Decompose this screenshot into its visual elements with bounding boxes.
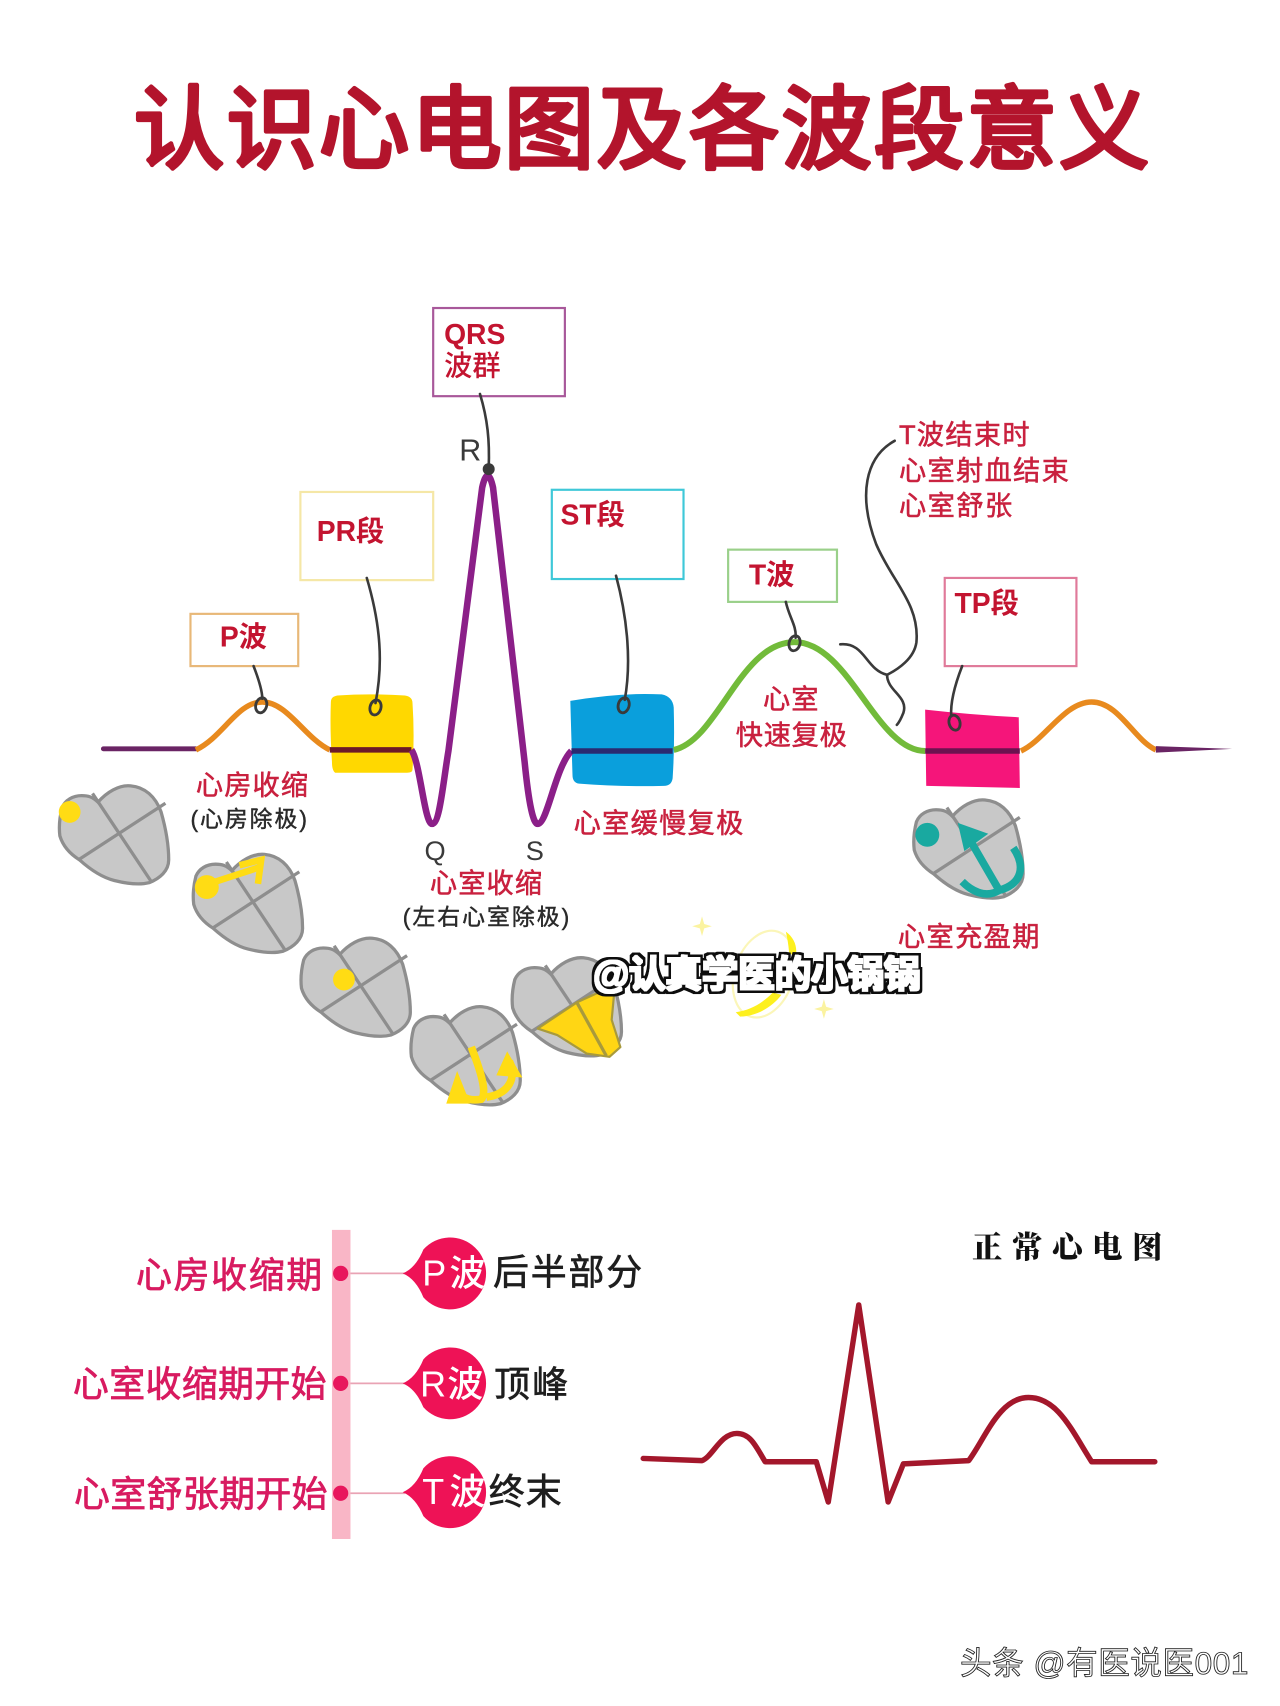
TP segment block [925,710,1020,788]
watermark caption: @认真学医的小锅锅 [593,954,921,995]
text: ventricular contraction [403,867,569,930]
letter R: R [459,433,481,467]
ST segment line [571,748,673,753]
row: atrial systole [136,1238,642,1309]
label box: TP segment: TP段 [955,587,1019,619]
icon: heart with ventricles filled [512,958,621,1057]
label box: ST segment [552,490,684,714]
text: atrial contraction: (心房除极) [190,806,307,832]
label box: P wave [190,614,298,714]
row: ventricular diastole start: T波 [422,1471,485,1512]
T wave curve [674,642,925,751]
label box: PR segment: PR段 [317,515,384,547]
P wave curve [196,702,330,750]
text: ventricular contraction: 心室收缩 [430,867,542,898]
baseline end taper [1156,746,1232,753]
label box: QRS complex: QRS [444,318,505,350]
annotation: end of T wave: T波结束时 [899,419,1030,450]
text: slow ventricular repolarization: 心室缓慢复极 [574,808,743,839]
text: rapid ventricular repolarization: 快速复极 [736,719,847,750]
row: ventricular systole start [73,1347,568,1419]
annotation: end of T wave [840,419,1069,725]
icon: heart with ventricular conduction [411,1007,522,1105]
text: atrial contraction [190,770,308,832]
icon: sparkle [692,916,712,936]
PR segment line [330,747,411,752]
letter Q: Q [424,835,446,866]
TP segment line [925,748,1020,753]
label box: ST segment: ST段 [561,499,625,531]
source watermark: 头条 @有医说医001 [960,1645,1248,1681]
label box: TP segment [945,578,1076,731]
row: ventricular systole start: R波 [420,1363,483,1404]
text: rapid ventricular repolarization [736,684,847,750]
icon: glowing yellow ring [722,923,806,1026]
title: 认识心电图及各波段意义 [134,80,1149,181]
text: rapid ventricular repolarization: 心室 [763,684,818,715]
row: ventricular systole start: 心室收缩期开始 [73,1363,327,1404]
baseline start [103,747,196,751]
icon: heart with teal filling arrows [914,800,1023,898]
icon: heart with SA node [59,786,169,884]
icon: sparkle [814,999,834,1019]
text: ventricular contraction: (左右心室除极) [403,904,569,930]
icon: heart with AV node [301,938,410,1036]
row: atrial systole: 心房收缩期 [136,1255,322,1296]
text: ventricular filling: 心室充盈期 [898,921,1039,952]
label box: T wave: T波 [749,558,794,590]
letter S: S [526,835,544,866]
PR segment block [331,694,414,773]
row: ventricular diastole start: 心室舒张期开始 [74,1473,328,1514]
second P wave curve [1021,702,1156,751]
QRS complex curve [411,476,571,824]
annotation: end of T wave: 心室舒张 [899,490,1012,521]
row: ventricular systole start: 顶峰 [494,1363,568,1404]
panel: ECG waveform diagram [103,476,1232,824]
label box: QRS complex [433,308,565,475]
ST segment block [570,694,674,786]
label box: T wave [728,550,837,652]
row: atrial systole: 后半部分 [493,1251,642,1292]
annotation: end of T wave: 心室射血结束 [899,455,1069,486]
vertical bar [332,1230,350,1539]
icon: heart with atrial spread [193,854,303,952]
label box: PR segment [300,492,433,716]
panel: timeline of cardiac phases [73,1230,642,1539]
label box: QRS complex: 波群 [444,349,501,381]
heading: normal ECG: 正常心电图 [972,1231,1162,1265]
row: atrial systole: P波 [422,1252,485,1293]
text: atrial contraction: 心房收缩 [196,770,308,801]
label box: P wave: P波 [220,621,267,653]
row: ventricular diastole start: 终末 [489,1471,562,1512]
chart: normal ECG trace [643,1305,1155,1502]
row: ventricular diastole start [74,1456,562,1528]
